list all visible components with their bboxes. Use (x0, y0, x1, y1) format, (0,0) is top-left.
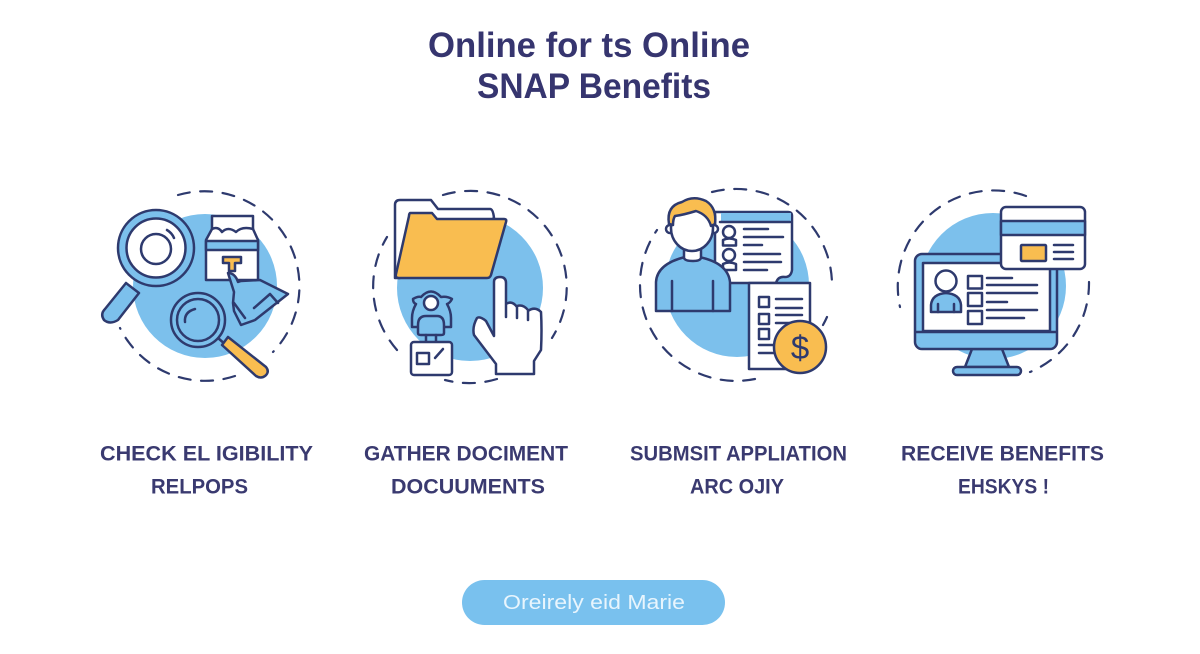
panel: gather documents icon (373, 191, 567, 383)
icon: dollar coin (774, 321, 826, 373)
panel: submit application icon (640, 189, 832, 381)
title (428, 26, 750, 106)
icon: pointing hand (473, 277, 542, 374)
icon: person (656, 198, 730, 311)
button: Oreirely eid Marie (503, 592, 685, 614)
label: step 2: GATHER DOCIMENT (364, 442, 568, 466)
icon: payment card (1001, 207, 1085, 269)
label: step 4: RECEIVE BENEFITS (901, 442, 1104, 466)
label: step 3: SUBMSIT APPLIATION (630, 442, 847, 466)
button (462, 580, 725, 625)
label: step 1: CHECK EL IGIBILITY (100, 442, 313, 466)
label: step 1: RELPOPS (151, 474, 248, 498)
label: step 2 (364, 442, 568, 498)
title: SNAP Benefits (477, 67, 711, 106)
icon: milk carton (206, 216, 258, 280)
label: step 3 (630, 442, 847, 498)
icon: checklist document (749, 283, 810, 369)
label: step 3: ARC OJIY (690, 474, 784, 498)
icon: person with box (411, 292, 452, 375)
title: Online for ts Online (428, 26, 750, 65)
label: step 1 (100, 442, 313, 498)
label: step 4 (901, 442, 1104, 498)
icon: folder (395, 200, 506, 278)
icon: applicant form (715, 212, 792, 283)
icon: dollar coin: $ (791, 329, 809, 366)
icon: hand holding label (228, 273, 288, 325)
icon: small magnifier (171, 293, 268, 378)
panel: check eligibility icon (102, 191, 299, 381)
icon: monitor (915, 254, 1057, 375)
panel: receive benefits icon (898, 190, 1089, 375)
label: step 2: DOCUUMENTS (391, 474, 545, 498)
icon: large magnifier (102, 210, 194, 322)
label: step 4: EHSKYS ! (958, 474, 1049, 498)
